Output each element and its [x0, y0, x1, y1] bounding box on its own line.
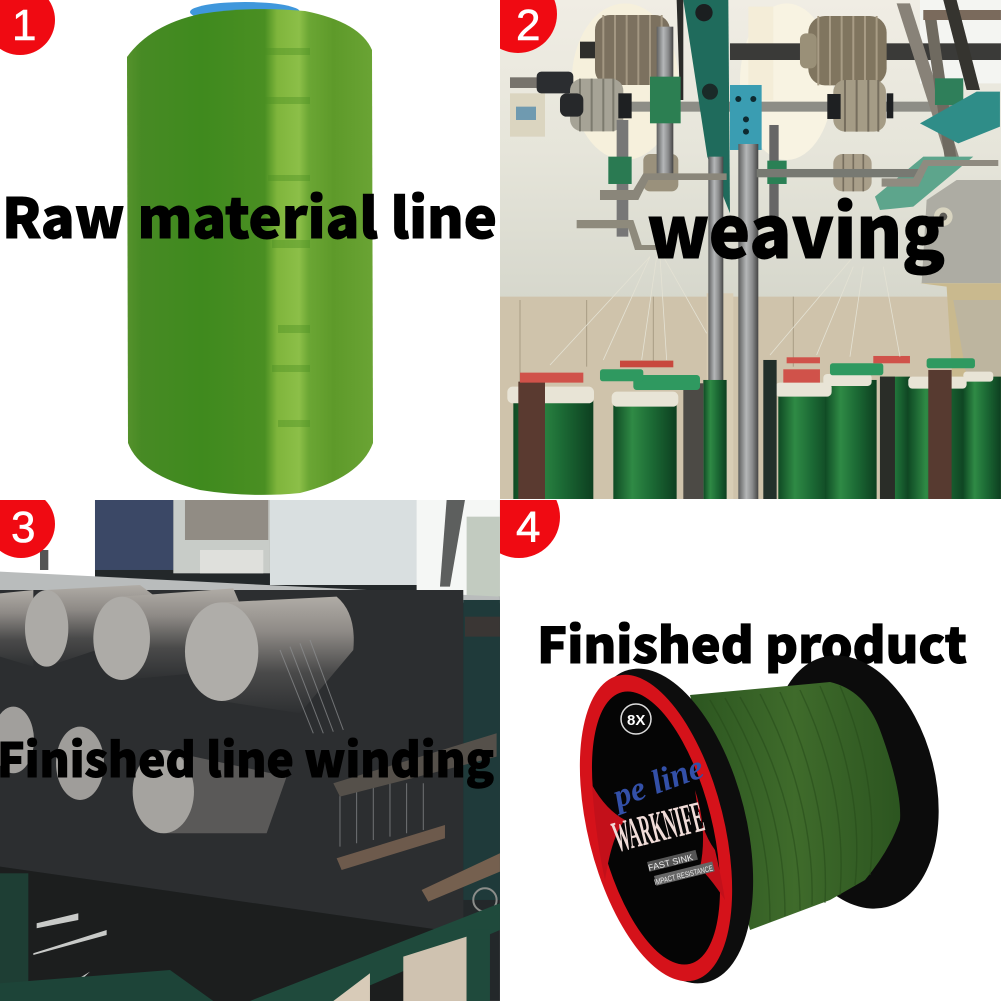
panel 3: finished line winding: [0, 490, 500, 1001]
green bobbins: [507, 356, 1001, 500]
small pulleys: [570, 79, 623, 131]
spool label: [605, 704, 715, 887]
heading: Raw material line: Raw material line: [2, 174, 497, 254]
tension rollers: [333, 733, 500, 912]
step badge 2: [500, 0, 557, 53]
panel 1: raw material line: [0, 0, 497, 495]
threads: [550, 257, 900, 365]
spool label: pe line: [605, 749, 709, 817]
step badge 1: 1: [12, 1, 36, 50]
winding machine photo: [0, 500, 500, 1001]
lower axle and arms: [757, 169, 923, 177]
front flange rim: [614, 668, 754, 984]
green blocks: [650, 77, 681, 123]
table frame and floor: [0, 867, 463, 1001]
step badge 2: 2: [516, 1, 540, 50]
teal block: [730, 85, 762, 150]
green line body: [690, 682, 900, 930]
product: braided line spool: [580, 655, 939, 984]
heading: Finished product: Finished product: [537, 607, 967, 678]
panel 4: finished product: [500, 500, 967, 984]
step badge 3: 3: [11, 503, 35, 552]
spool label: IMPACT RESISTANCE: [653, 864, 714, 887]
panel 2: weaving: [479, 0, 1001, 500]
middle axle: [627, 102, 980, 112]
red ring: [580, 674, 732, 982]
step badge 4: [500, 500, 560, 558]
upper pulleys: [595, 15, 670, 85]
rods: [657, 27, 673, 173]
red flames on label: [592, 785, 625, 880]
heading: Finished line winding: Finished line winding: [0, 722, 494, 791]
step badge 3: [0, 500, 55, 558]
spool label: FAST SINK: [647, 852, 694, 873]
thread lines: [280, 640, 423, 847]
cream disks: [572, 32, 678, 159]
spool label: 8X: [627, 712, 645, 729]
cylinders: [0, 585, 354, 833]
step badge 4: 4: [516, 503, 540, 552]
product: braided line spool: WARKNIFE: [608, 792, 709, 862]
step badge 1: [0, 0, 55, 55]
back flange: [788, 655, 939, 909]
icon: green raw material spool: [127, 2, 373, 495]
upper axles: [730, 43, 1001, 60]
motor box: [922, 180, 1001, 283]
weaving machine photo: [500, 0, 1001, 500]
heading: weaving: weaving: [647, 174, 945, 279]
machine top: [0, 572, 500, 603]
label disc: [592, 692, 720, 964]
teal plate and chain: [677, 0, 683, 100]
